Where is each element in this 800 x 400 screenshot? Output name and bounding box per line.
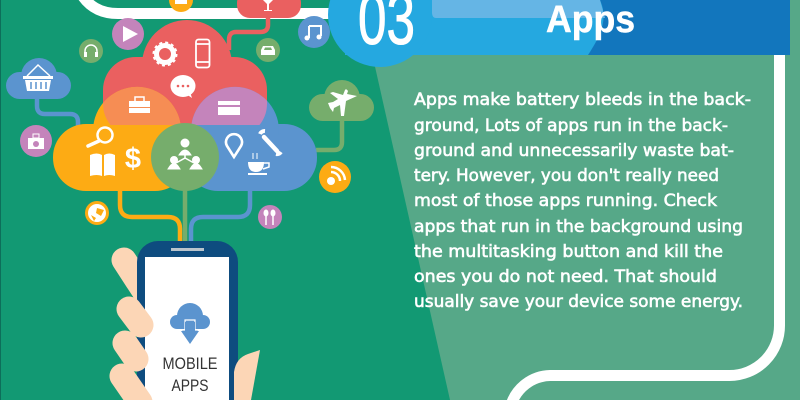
white border line: upper left <box>80 0 340 14</box>
body text: ground, Lots of apps run in the back- <box>414 116 728 136</box>
icon: briefcase <box>129 97 150 113</box>
icon: wine glass <box>263 0 273 11</box>
icon: credit card <box>218 101 240 115</box>
icon: car <box>256 38 280 62</box>
body text: tery. However, you don't really need <box>414 166 719 186</box>
icon: mail <box>169 0 193 12</box>
body text: Apps make battery bleeds in the back- <box>414 90 751 110</box>
smartphone: APPS <box>172 377 208 395</box>
orange cloud <box>53 87 188 191</box>
icon: magnifier <box>88 128 112 146</box>
body text: usually save your device some energy. <box>414 292 743 312</box>
icon: globe <box>85 201 109 225</box>
icon: dollar sign: $ <box>125 143 141 175</box>
blue cloud <box>185 87 317 191</box>
body text: the multitasking button and kill the <box>414 242 723 262</box>
icon: network people <box>168 139 202 169</box>
body text: apps that run in the background using <box>414 217 743 237</box>
icon: basket <box>23 65 53 91</box>
connector lines <box>37 17 342 241</box>
smartphone <box>137 241 238 400</box>
green centre circle <box>151 123 219 191</box>
icon: speech bubble <box>170 75 196 98</box>
icon: cloud download <box>170 303 210 344</box>
icon: airplane <box>328 89 357 116</box>
icon: spoon and fork <box>258 205 282 229</box>
header banner <box>328 0 790 67</box>
icon: gear <box>154 42 176 66</box>
body text <box>414 90 751 312</box>
icon: open book <box>90 154 115 176</box>
basket cloud <box>6 58 71 99</box>
body text: ones you do not need. That should <box>414 267 717 287</box>
phone label: MOBILE <box>162 355 218 373</box>
icon: headphones <box>79 39 103 63</box>
icon: map pin <box>226 134 242 157</box>
icon: rss <box>319 161 351 193</box>
hand: back finger <box>124 260 150 300</box>
plane cloud <box>309 80 374 121</box>
heading: Apps <box>546 0 635 41</box>
icon: smartphone <box>196 40 210 68</box>
body text: most of those apps running. Check <box>414 191 717 211</box>
red cloud <box>103 20 267 137</box>
white border line: lower right <box>511 50 780 400</box>
icon: camera <box>20 125 52 157</box>
hand: front fingers and thumb <box>122 309 260 400</box>
icon: play <box>112 18 144 50</box>
panel: text background <box>360 0 800 400</box>
cloud overlaps <box>103 86 267 125</box>
top red cloud <box>237 0 301 18</box>
body text: ground and unnecessarily waste bat- <box>414 141 734 161</box>
icon: music note <box>298 16 330 48</box>
icon: wrench <box>260 131 281 154</box>
icon: coffee cup <box>248 153 269 175</box>
